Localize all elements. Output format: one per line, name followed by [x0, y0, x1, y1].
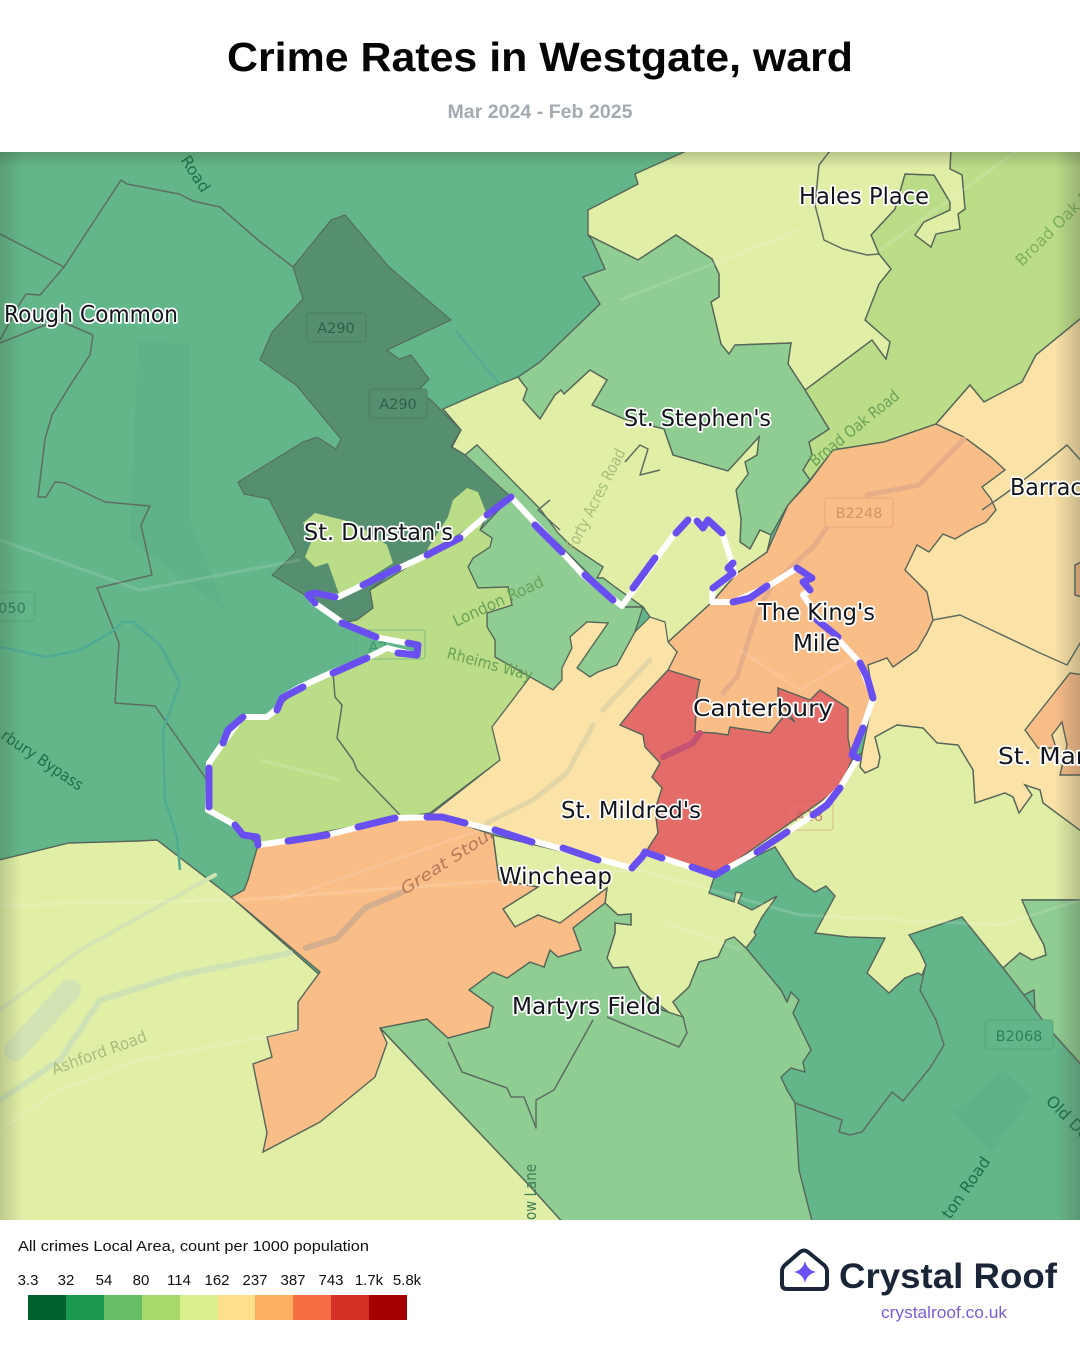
legend values: 162 [204, 1272, 230, 1289]
legend values: 743 [318, 1272, 344, 1289]
road name labels: ton Road [938, 1153, 994, 1222]
legend values: 32 [58, 1272, 74, 1289]
road name labels: rbury Bypass [0, 726, 87, 794]
legend values: 80 [133, 1272, 149, 1289]
map background: low crime green [0, 152, 1080, 1220]
legend values: 54 [96, 1272, 112, 1289]
region: Martyrs Field mid green [380, 903, 813, 1225]
road shield: B2248 [825, 498, 893, 527]
legend colour scale [28, 1295, 407, 1320]
place label: St. Stephen's: St. Stephen's [624, 406, 771, 432]
subtitle: date range: Mar 2024 - Feb 2025 [448, 102, 633, 123]
road name labels: Forty Acres Road [562, 445, 629, 554]
road shield: A28: A28 [795, 809, 823, 825]
road shield: B2248: B2248 [836, 506, 882, 522]
street network (faint) [0, 152, 1017, 1130]
website link text: crystalroof.co.uk [881, 1304, 1008, 1322]
region: far east orange patches [1025, 560, 1080, 775]
road shield: ward A-road: A2 [368, 640, 388, 656]
region: south central pale green Wincheap [493, 835, 777, 1017]
place label: St. Dunstan's: St. Dunstan's [304, 520, 453, 546]
legend [18, 1238, 422, 1320]
icon: house with star [782, 1250, 827, 1289]
legend values: 237 [242, 1272, 268, 1289]
region: south-east pale green [713, 725, 1080, 993]
railway line [0, 870, 1080, 925]
place label: St. Mildred's: St. Mildred's [561, 798, 701, 824]
edge fade vignette [0, 152, 1080, 1220]
legend title: All crimes Local Area, count per 1000 population [18, 1238, 369, 1255]
region: south-west pale green [0, 840, 565, 1225]
place label: Rough Common: Rough Common [4, 302, 178, 328]
Westgate ward boundary: white base [208, 497, 873, 875]
logo: Crystal Roof [782, 1250, 1057, 1322]
region: St Stephen's pale green [443, 370, 771, 642]
road shield: A28 [786, 801, 833, 830]
road shield: A2050 [0, 592, 35, 621]
road name labels: Ashford Road [49, 1027, 149, 1079]
legend values: 1.7k [355, 1272, 384, 1289]
region: pale orange north-east and east [860, 315, 1080, 834]
road shield: A290 upper [307, 313, 366, 342]
road shield: A290 lower: A290 [379, 397, 417, 413]
region: St Stephen's mid green [518, 235, 829, 549]
region: Canterbury red [620, 670, 852, 875]
place label: Canterbury: Canterbury [693, 696, 833, 722]
road shield: B2068: B2068 [996, 1029, 1042, 1045]
legend values [18, 1272, 422, 1289]
Westgate ward boundary: purple dashes [209, 497, 873, 875]
title: Crime Rates in Westgate, ward [227, 34, 853, 80]
legend values: 114 [167, 1272, 191, 1289]
logo wordmark: Crystal Roof [839, 1257, 1057, 1296]
region: King's Mile orange [669, 424, 1006, 749]
region: east mid green [1003, 900, 1080, 1069]
region: Hales Place pale green [588, 147, 965, 390]
road name labels: Broad Oak Road [806, 386, 903, 470]
region: dark low-crime zone A290 [238, 215, 511, 623]
region: St Dunstan's light green [208, 515, 530, 845]
legend values: 387 [280, 1272, 306, 1289]
place label: The King's Mile: Mile [793, 631, 840, 657]
place label: Martyrs Field: Martyrs Field [512, 994, 661, 1020]
road shield: A290 upper: A290 [317, 321, 355, 337]
place label: Hales Place: Hales Place [799, 184, 929, 210]
road name labels: Great Stour [397, 822, 501, 898]
road name labels: Rheims Way [445, 644, 535, 685]
river Stour [0, 439, 964, 1100]
place label: The King's Mile: The King's [757, 600, 875, 626]
road name labels [0, 152, 1080, 1222]
region: Wincheap orange [231, 817, 607, 1152]
road shield: ward A-road [357, 630, 425, 659]
region: mid green west of ward [468, 497, 643, 690]
region: north-east light green [803, 147, 1080, 480]
road shield: A290 lower [369, 389, 427, 418]
river channels [0, 330, 500, 870]
road name labels: ow Lane [521, 1164, 540, 1220]
road name labels: London Road [450, 572, 547, 631]
road shield: B2068 [985, 1020, 1053, 1049]
place label: Wincheap: Wincheap [499, 864, 612, 890]
ward and local boundary lines [0, 147, 1080, 1135]
region: strip green beside ward [465, 445, 643, 607]
legend values: 3.3 [18, 1272, 38, 1289]
place label: The King's Mile [757, 600, 875, 657]
legend values: 5.8k [393, 1272, 422, 1289]
region: St Mildred's pale orange [430, 617, 677, 868]
road name labels: Road [177, 152, 214, 196]
region: St Dunstan's northern blobs [303, 488, 487, 597]
